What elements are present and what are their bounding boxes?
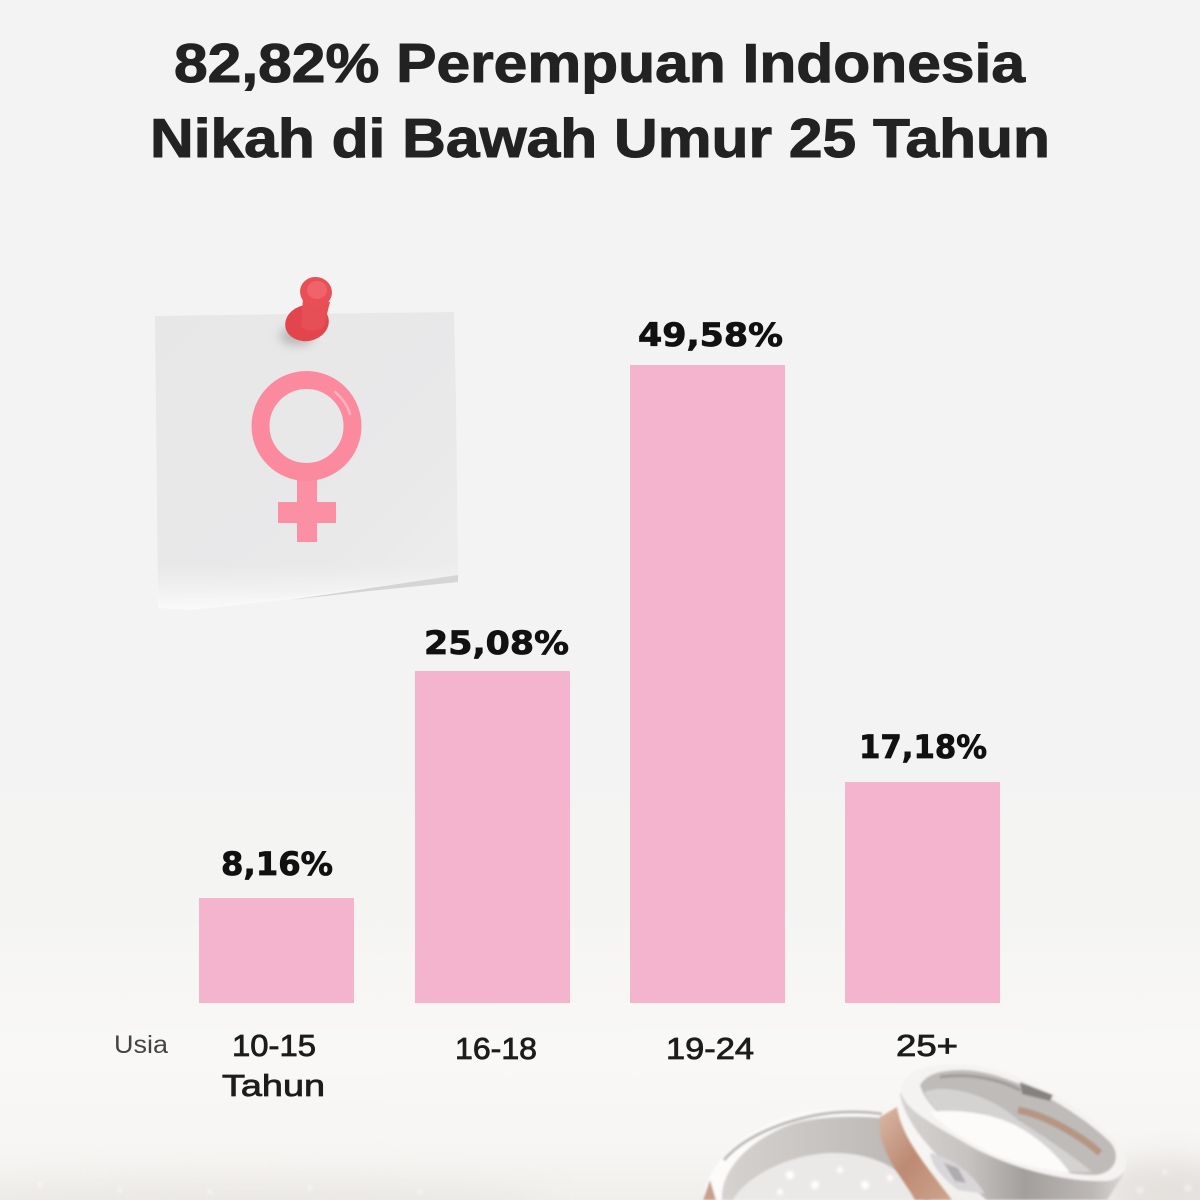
rose gold band: [879, 1107, 952, 1200]
title: [150, 32, 1050, 169]
value labels: 8,16%: [221, 845, 333, 883]
left ring interior glitter: [733, 1153, 925, 1200]
value labels: 25,08%: [424, 624, 569, 662]
bar chart: [114, 316, 1000, 1103]
icon: wedding rings: [703, 1065, 1127, 1200]
dark reflection: [1020, 1082, 1053, 1101]
icon: female symbol: [260, 380, 352, 542]
icon: red push pin: [282, 274, 335, 345]
right ring: [879, 1065, 1127, 1200]
value labels: [221, 316, 987, 883]
left ring: [703, 1109, 930, 1200]
title: Nikah di Bawah Umur 25 Tahun: [150, 107, 1050, 169]
axis title: Usia: [114, 1031, 168, 1059]
bar: 16-18: [415, 671, 570, 1003]
diamonds: [930, 1153, 985, 1194]
bar: 10-15: [199, 898, 354, 1003]
inner wall: [920, 1070, 1116, 1175]
axis labels: 10-15: [232, 1028, 316, 1063]
left ring inner wall: [722, 1117, 930, 1200]
bright rim: [901, 1065, 1127, 1181]
left ring rim: [703, 1109, 900, 1200]
note paper: [155, 312, 458, 610]
value labels: 17,18%: [859, 728, 987, 766]
sticky note with pin and female symbol: [155, 274, 458, 610]
outer band: [900, 1093, 1127, 1200]
axis labels: 25+: [896, 1028, 958, 1063]
axis labels: 16-18: [455, 1031, 537, 1066]
value labels: 49,58%: [638, 316, 783, 354]
axis labels: Tahun: [222, 1068, 325, 1103]
hole: [930, 1111, 1070, 1173]
rose reflection: [1018, 1110, 1100, 1153]
pin shadow: [280, 327, 314, 345]
axis labels: [222, 1028, 958, 1103]
bar: 19-24: [630, 365, 785, 1003]
inner highlight: [924, 1089, 1092, 1172]
bar: 25+: [845, 782, 1000, 1003]
axis labels: 19-24: [666, 1031, 754, 1066]
title: 82,82% Perempuan Indonesia: [174, 32, 1025, 94]
